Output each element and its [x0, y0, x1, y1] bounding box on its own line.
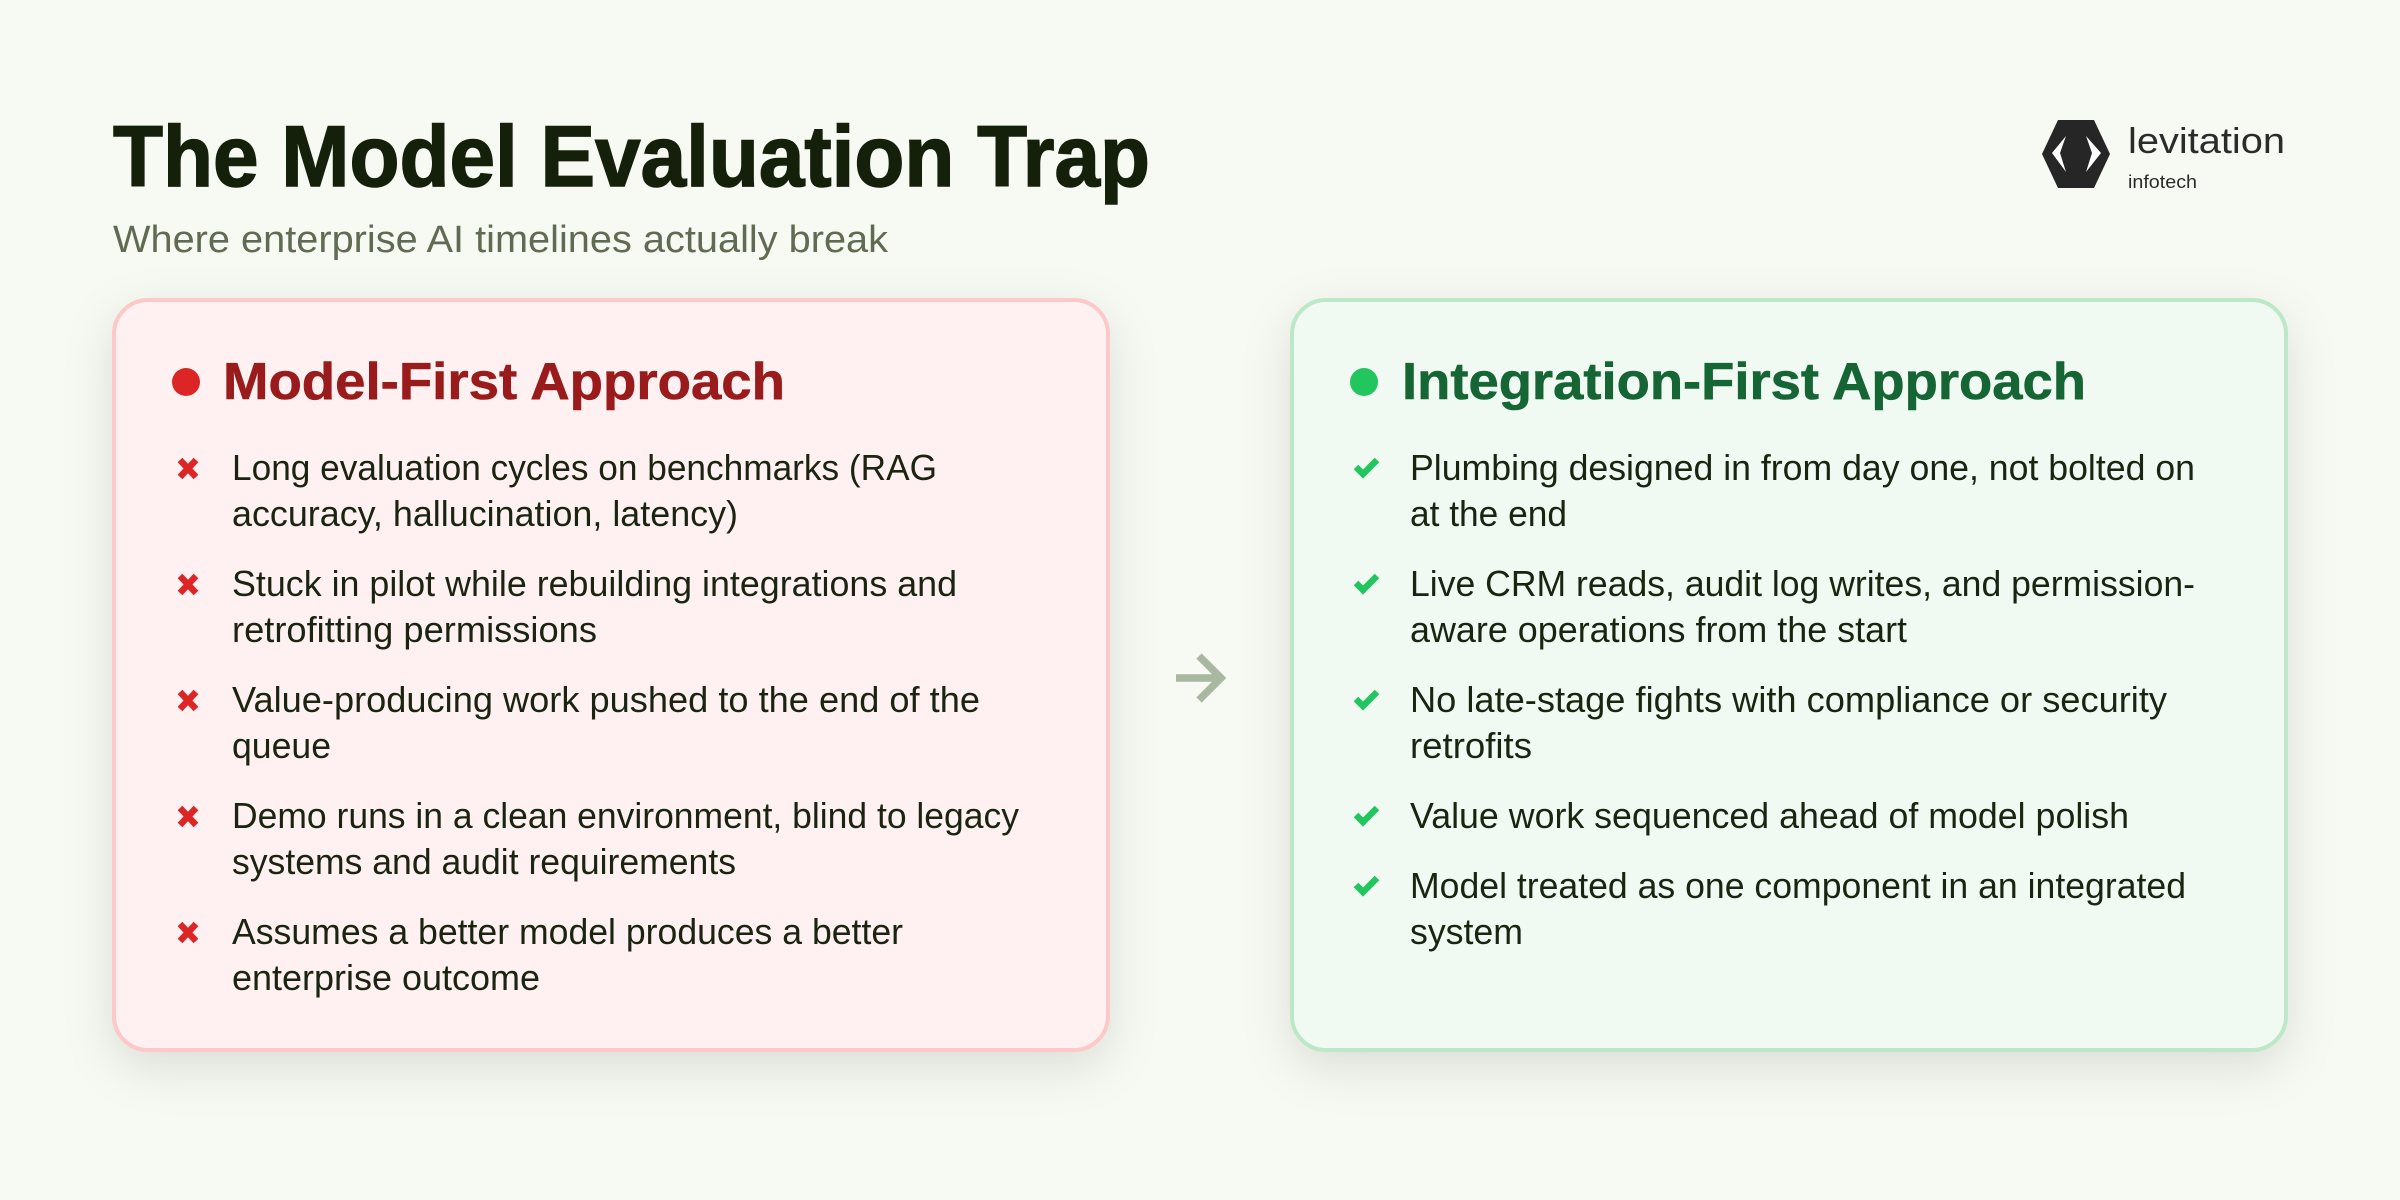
item text: Plumbing designed in from day one, not bolted on — [1410, 447, 2195, 488]
list item 2 — [1356, 563, 2195, 650]
item text: aware operations from the start — [1410, 609, 1907, 650]
item text — [232, 911, 903, 998]
item text: Live CRM reads, audit log writes, and permission- — [1410, 563, 2195, 604]
status dot: green — [1350, 368, 1378, 396]
list item 4 — [1356, 795, 2129, 836]
panel background — [1292, 300, 2286, 1050]
item text — [1410, 679, 2167, 766]
item text — [1410, 447, 2195, 534]
icon: check — [1356, 878, 1377, 892]
item text — [232, 679, 980, 766]
logo sub-wordmark: infotech — [2128, 172, 2197, 192]
heading: integration-first: Integration-First Approach — [1402, 353, 2086, 411]
status dot: red — [172, 368, 200, 396]
icon: hexagon logo mark — [2042, 120, 2110, 188]
item text — [1410, 865, 2186, 952]
item text: queue — [232, 725, 331, 766]
item text: Value-producing work pushed to the end of the — [232, 679, 980, 720]
title: The Model Evaluation Trap — [113, 109, 1150, 205]
item text: enterprise outcome — [232, 957, 540, 998]
logo wordmark: levitation — [2128, 120, 2285, 161]
item text — [1410, 563, 2195, 650]
item text: Long evaluation cycles on benchmarks (RAG — [232, 447, 937, 488]
item text: systems and audit requirements — [232, 841, 736, 882]
arrow — [1176, 656, 1221, 700]
list item 5 — [180, 911, 903, 998]
icon: cross — [180, 808, 196, 825]
item text: retrofits — [1410, 725, 1532, 766]
item text: system — [1410, 911, 1523, 952]
icon: check — [1356, 692, 1377, 706]
item text: Stuck in pilot while rebuilding integrations and — [232, 563, 957, 604]
item text: Assumes a better model produces a better — [232, 911, 903, 952]
subtitle: Where enterprise AI timelines actually break — [113, 219, 889, 261]
item text: Demo runs in a clean environment, blind to legacy — [232, 795, 1019, 836]
item text: Model treated as one component in an integrated — [1410, 865, 2186, 906]
icon: check — [1356, 460, 1377, 474]
icon: cross — [180, 460, 196, 477]
item text — [232, 563, 957, 650]
icon: cross — [180, 924, 196, 941]
icon: check — [1356, 808, 1377, 822]
list item 4 — [180, 795, 1019, 882]
icon: cross — [180, 576, 196, 593]
list item 1 — [1356, 447, 2195, 534]
item text: retrofitting permissions — [232, 609, 597, 650]
list item 1 — [180, 447, 937, 534]
icon: cross — [180, 692, 196, 709]
list item 3 — [180, 679, 980, 766]
list item 2 — [180, 563, 957, 650]
item text — [232, 795, 1019, 882]
item text: accuracy, hallucination, latency) — [232, 493, 738, 534]
list item 3 — [1356, 679, 2167, 766]
item text: No late-stage fights with compliance or security — [1410, 679, 2167, 720]
heading: model-first: Model-First Approach — [223, 353, 785, 411]
panel background — [114, 300, 1108, 1050]
item text: Value work sequenced ahead of model polish — [1410, 795, 2129, 836]
list item 5 — [1356, 865, 2186, 952]
icon: check — [1356, 576, 1377, 590]
panel: integration-first approach — [1292, 300, 2286, 1050]
item text — [232, 447, 937, 534]
item text: at the end — [1410, 493, 1567, 534]
panel: model-first approach — [114, 300, 1108, 1050]
logo: levitation infotech — [2042, 120, 2285, 192]
